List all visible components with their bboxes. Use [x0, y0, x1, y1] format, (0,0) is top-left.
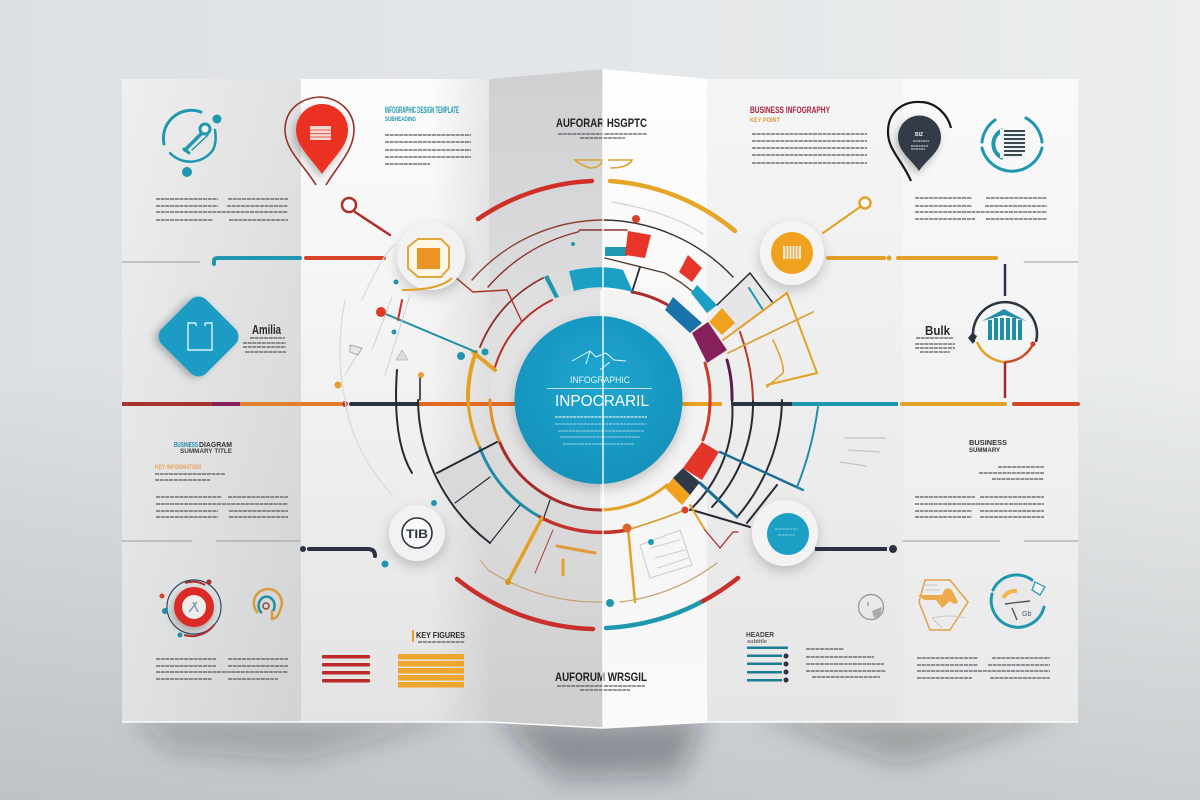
text block: far-right top — [915, 198, 1047, 219]
red bars — [322, 655, 370, 682]
panel: inner right — [707, 79, 903, 722]
icon: orange hexagon — [918, 580, 968, 630]
hub body text — [555, 417, 647, 444]
text block: far-left lower: SUMMARY TITLE — [180, 449, 232, 455]
hub title: INPOCRARIL — [555, 393, 649, 410]
text block: far-left top — [156, 199, 288, 220]
heading and list: inner-right bottom — [746, 632, 886, 682]
icon: dark map pin — [888, 102, 951, 181]
icon: grey circle — [858, 594, 884, 620]
inner ring segments — [495, 300, 552, 367]
panel: centre right fold — [603, 69, 707, 728]
heading: inner-left: SUBHEADING — [385, 117, 416, 123]
orange bars — [398, 654, 464, 688]
dots — [334, 215, 688, 607]
panel: far left — [122, 79, 301, 722]
hub mountain icon — [572, 351, 626, 370]
text block: far-right lower: SUMMARY — [969, 447, 1001, 454]
heading and bars: inner-left bottom — [322, 630, 466, 688]
icon: red ring — [160, 580, 221, 638]
sheet bottom edge — [122, 722, 1078, 728]
tab: red square — [625, 231, 651, 258]
fold edges — [602, 69, 604, 728]
icon: blue diamond — [154, 292, 243, 381]
node: red pointer — [342, 198, 390, 235]
list icons — [784, 654, 788, 682]
colour tabs around ring — [544, 231, 735, 505]
icon: teal circle tool: Gb — [1022, 611, 1031, 618]
thin top arcs — [340, 202, 733, 495]
heading: inner-right: KEY POINT — [750, 117, 780, 124]
heading: inner-left: INFOGRAPHIC DESIGN TEMPLATE — [385, 105, 459, 115]
tab: teal label — [605, 247, 627, 256]
teal list bars — [747, 646, 788, 682]
text block: far-left lower: DIAGRAM — [199, 442, 232, 449]
text block: far-left bottom — [156, 659, 288, 679]
icon: top bowls — [575, 160, 632, 168]
panel: inner left fold shading — [430, 79, 489, 722]
coloured radials — [381, 312, 476, 352]
text block — [385, 135, 471, 164]
panel: far right — [903, 79, 1078, 722]
text block — [752, 134, 867, 163]
icon: teal key circle — [163, 110, 222, 177]
heading and list: inner-right bottom: HEADER — [746, 632, 774, 639]
text block: far-right lower: BUSINESS — [969, 440, 1007, 447]
tab: teal arc band — [569, 267, 633, 292]
tab: purple — [692, 322, 727, 363]
panel: centre left fold — [489, 69, 603, 728]
heading: centre bottom: AUFORUM WRSGIL — [555, 670, 647, 684]
text block: far-left lower — [155, 442, 288, 517]
heading: centre top: AUFORAR HSGPTC — [556, 116, 647, 130]
text block: far-right lower — [915, 440, 1044, 517]
bank building — [982, 309, 1026, 340]
text block: far-right bottom — [917, 658, 1050, 678]
tab: red square 2 — [679, 255, 702, 282]
node: orange pointer — [823, 198, 870, 233]
label: far-left middle — [243, 322, 286, 352]
icon: spiral — [254, 589, 282, 619]
tab: red lower — [683, 442, 719, 480]
label: far-right middle — [915, 323, 955, 352]
node: badge bottom-left: TIB — [406, 527, 428, 541]
tab: orange lower — [665, 478, 690, 505]
text block: far-left lower: KEY INFORMATION — [155, 465, 201, 471]
icon: dark map pin: BIZ — [915, 132, 923, 138]
thin bottom arc — [488, 570, 603, 602]
sheet shadows — [130, 715, 1070, 778]
icon: teal document ring — [982, 118, 1042, 171]
tab: navy lower — [673, 468, 700, 495]
heading: centre bottom — [555, 670, 647, 690]
text block: far-left lower: BUSINESS — [174, 442, 198, 449]
node: orange top-right — [760, 221, 824, 285]
brochure sheet — [122, 69, 1078, 778]
heading: inner-right: BUSINESS INFOGRAPHY — [750, 105, 830, 115]
hub ring — [514, 316, 682, 484]
dark rings — [396, 267, 782, 543]
radial diagram — [334, 181, 885, 629]
label: far-right middle: Bulk — [925, 323, 951, 338]
horizontal connector lines — [122, 256, 1078, 556]
icon: bank ring — [968, 264, 1037, 398]
central hub — [514, 316, 682, 484]
heading and bars: inner-left bottom: KEY FIGURES — [416, 631, 466, 640]
outer arcs — [457, 181, 738, 629]
left ghost marks — [345, 295, 410, 375]
tab: teal — [691, 285, 717, 313]
tab: orange — [709, 308, 735, 335]
icon: teal circle tool — [991, 575, 1045, 627]
diagram cell shading — [437, 273, 803, 565]
heading: centre top — [556, 116, 647, 138]
heading and list: inner-right bottom: subtitle — [747, 639, 767, 645]
node: octagon top-left — [397, 222, 465, 290]
heading: inner-right — [750, 105, 867, 163]
hub subtitle: INFOGRAPHIC — [570, 375, 630, 385]
label: far-left middle: Amilia — [252, 322, 282, 337]
tab: blue — [665, 297, 702, 333]
node: teal bottom-right — [752, 500, 818, 566]
panel: inner left — [301, 79, 489, 722]
heading: inner-left — [385, 105, 471, 164]
list text — [806, 649, 886, 677]
node: badge bottom-left — [389, 505, 445, 561]
icon: red map pin — [285, 97, 354, 185]
